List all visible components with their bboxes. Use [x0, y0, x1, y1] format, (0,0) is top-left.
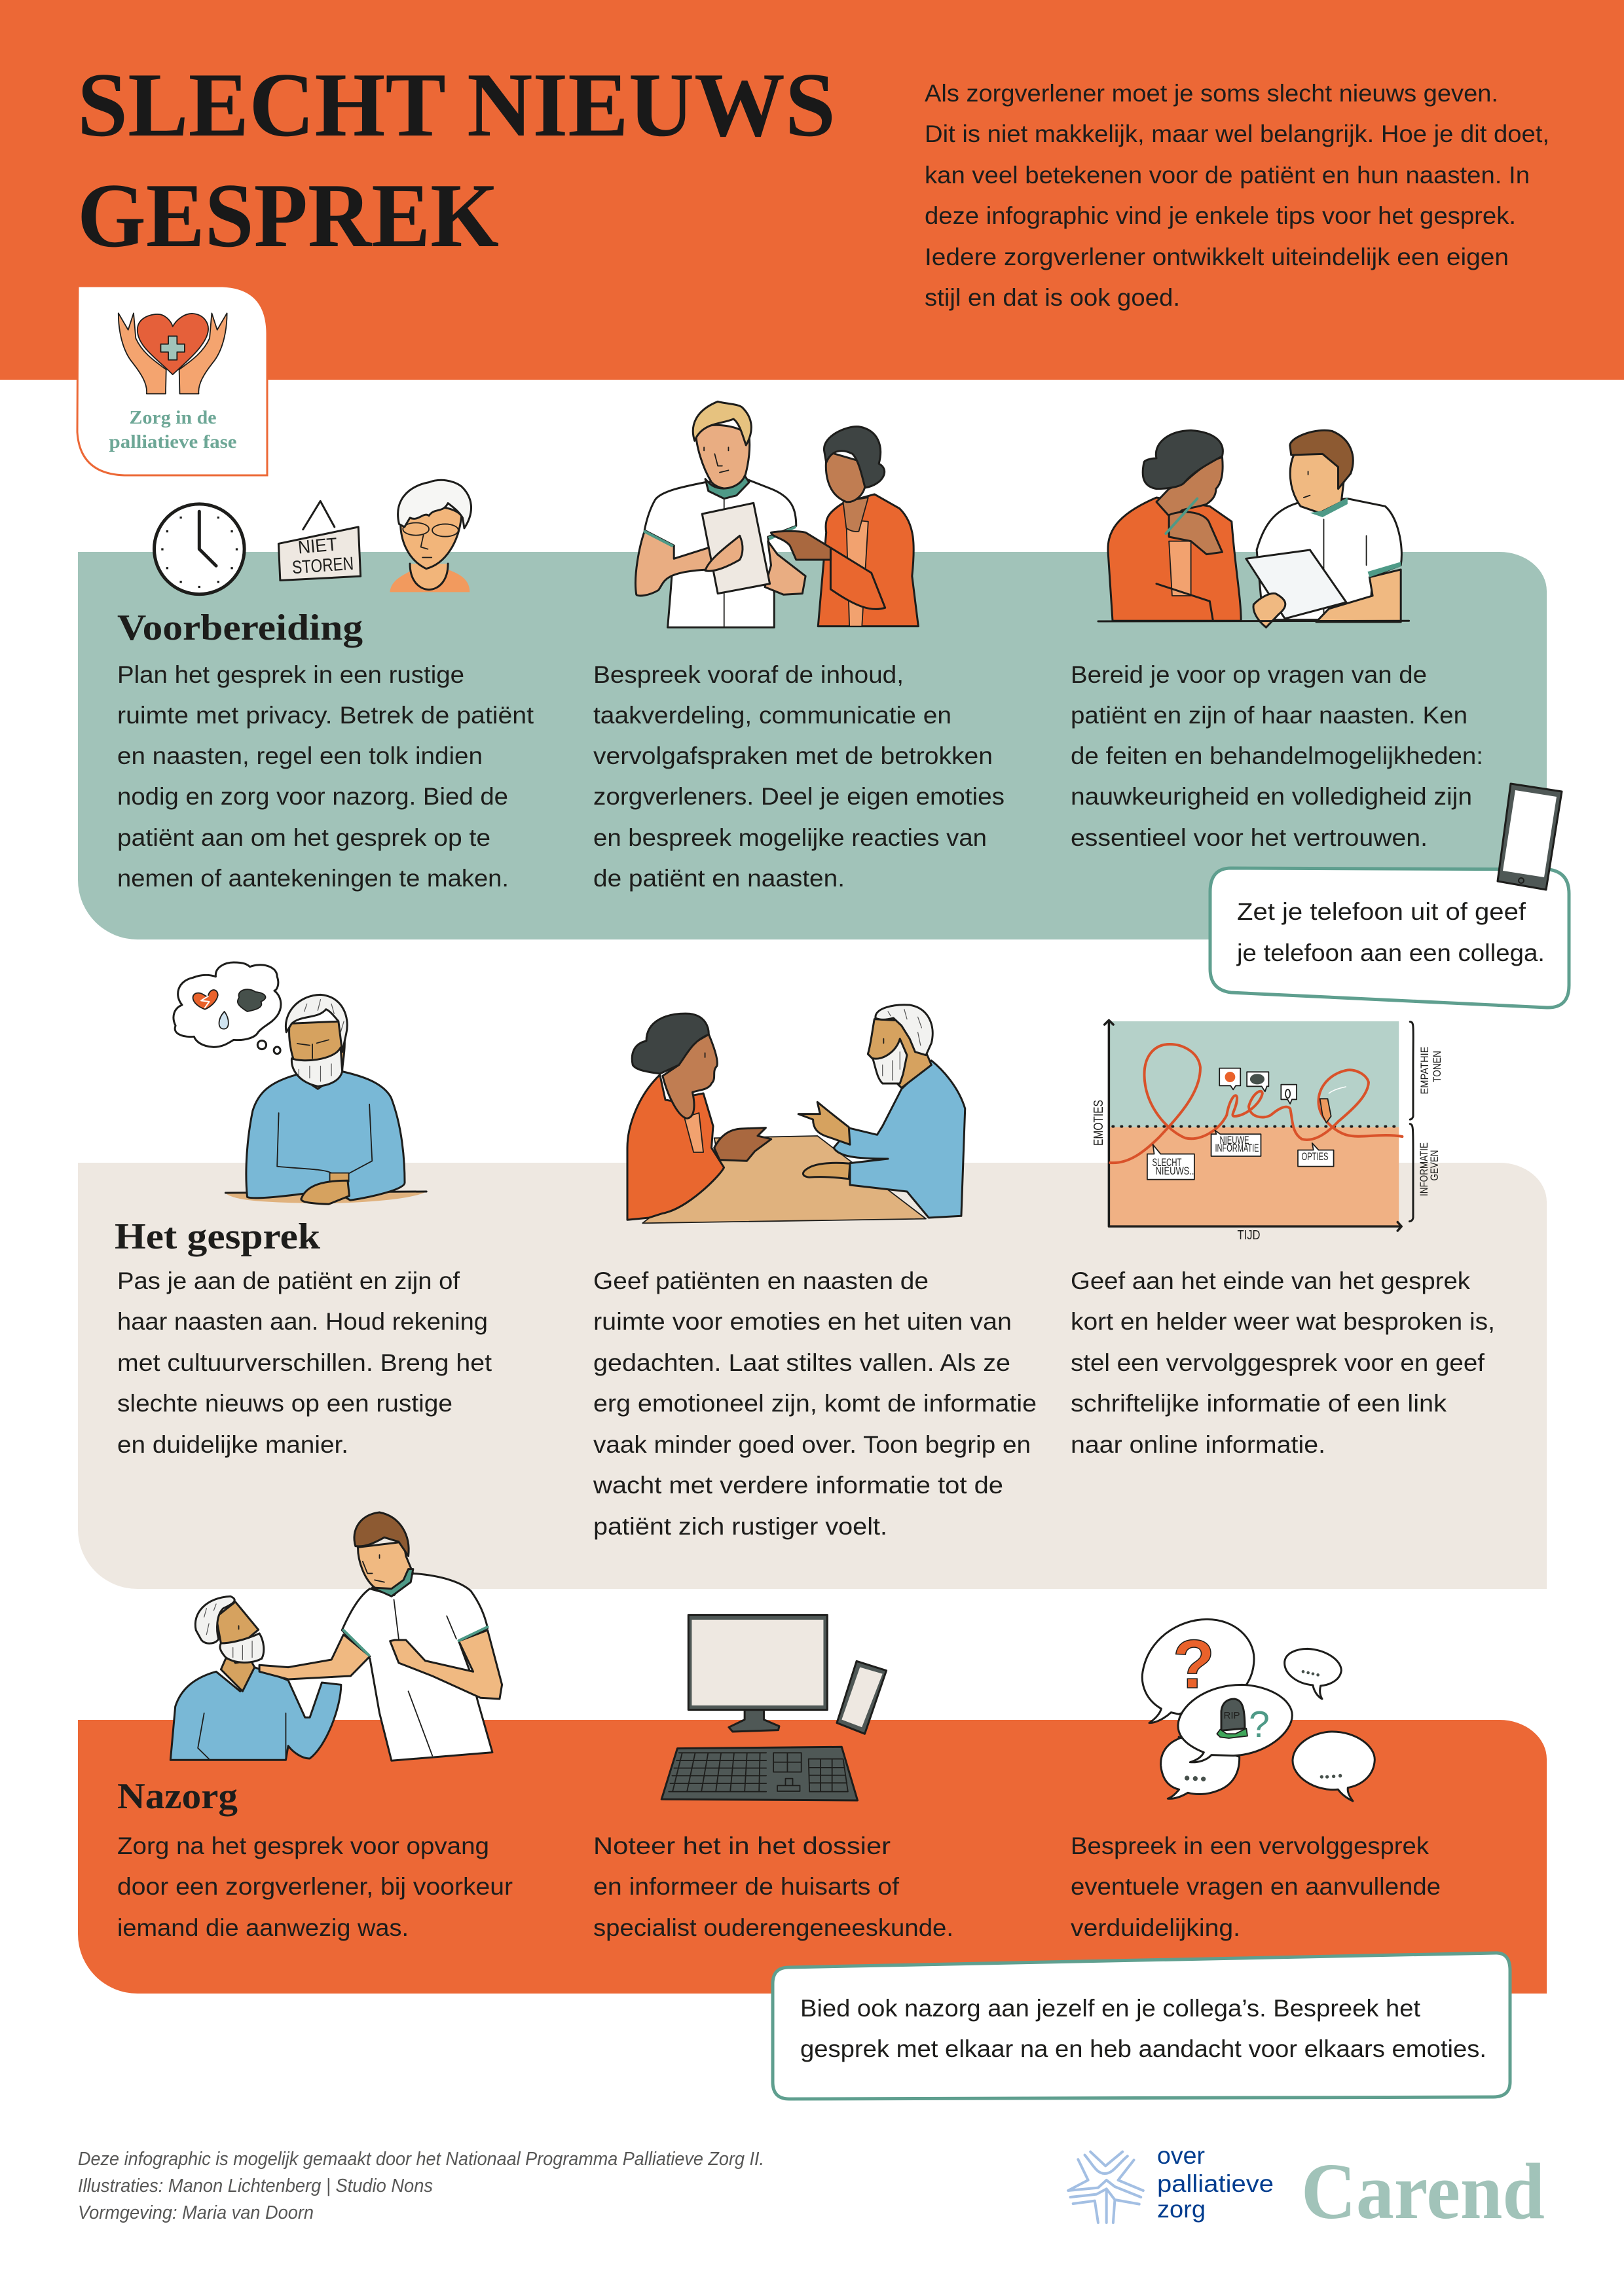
text column 3: Bespreek in een vervolggesprek	[1071, 1832, 1430, 1859]
intro text: Dit is niet makkelijk, maar wel belangrijk. Hoe je dit doet,	[925, 120, 1549, 147]
text column 1: ruimte met privacy. Betrek de patiënt	[117, 702, 534, 729]
text column 1: nemen of aantekeningen te maken.	[117, 865, 509, 892]
icon: niet storen sign	[278, 501, 361, 581]
text column 3	[1071, 1267, 1495, 1458]
text column 2: gedachten. Laat stiltes vallen. Als ze	[593, 1349, 1010, 1376]
text column 1: en naasten, regel een tolk indien	[117, 742, 483, 769]
chart axis labels: EMPATHIE	[1418, 1046, 1431, 1095]
text column 1: slechte nieuws op een rustige	[117, 1390, 452, 1417]
text column 2: zorgverleners. Deel je eigen emoties	[593, 783, 1005, 810]
text column 1: nodig en zorg voor nazorg. Bied de	[117, 783, 508, 810]
illustration: colleagues at table with paper	[1098, 430, 1409, 627]
text column 3: patiënt en zijn of haar naasten. Ken	[1071, 702, 1467, 729]
footer credits	[78, 2149, 764, 2223]
footer credits: Illustraties: Manon Lichtenberg | Studio Nons	[78, 2176, 433, 2196]
illustration: speech bubbles	[1142, 1619, 1375, 1801]
text column 2: vervolgafspraken met de betrokken	[593, 742, 993, 769]
text column 1: haar naasten aan. Houd rekening	[117, 1308, 488, 1335]
icon: person with glasses	[390, 480, 471, 592]
text column 3: eventuele vragen en aanvullende	[1071, 1873, 1441, 1900]
chart axis labels: EMOTIES	[1092, 1100, 1106, 1146]
text column 3: essentieel voor het vertrouwen.	[1071, 824, 1428, 851]
callout: nazorg voor jezelf: gesprek met elkaar na en heb aandacht voor elkaars emoties.	[800, 2035, 1486, 2062]
intro text: stijl en dat is ook goed.	[925, 284, 1180, 311]
text column 3: schriftelijke informatie of een link	[1071, 1390, 1447, 1417]
intro text: kan veel betekenen voor de patiënt en hun naasten. In	[925, 162, 1530, 189]
illustration: computer, keyboard and phone	[661, 1615, 887, 1800]
illustration: sad man with thought cloud	[174, 962, 426, 1204]
badge: zorg in de palliatieve fase	[77, 286, 267, 475]
text column 3: stel een vervolggesprek voor en geef	[1071, 1349, 1485, 1376]
text column 2: en informeer de huisarts of	[593, 1873, 900, 1900]
footer credits: Vormgeving: Maria van Doorn	[78, 2202, 314, 2223]
panel: voorbereiding	[78, 552, 1547, 939]
icon: hands holding heart	[119, 313, 227, 393]
intro text: deze infographic vind je enkele tips voor het gesprek.	[925, 202, 1516, 229]
heading: voorbereiding: Voorbereiding	[117, 608, 363, 648]
chart labels: OPTIES	[1302, 1150, 1328, 1163]
icon: teal question mark: ?	[1249, 1704, 1270, 1745]
text column 1: door een zorgverlener, bij voorkeur	[117, 1873, 513, 1900]
intro text: Als zorgverlener moet je soms slecht nieuws geven.	[925, 80, 1498, 107]
text column 1: Zorg na het gesprek voor opvang	[117, 1832, 489, 1859]
text column 3: Geef aan het einde van het gesprek	[1071, 1267, 1471, 1294]
icon: star	[1068, 2152, 1143, 2223]
text column 3: Bereid je voor op vragen van de	[1071, 661, 1427, 688]
text column 1: en duidelijke manier.	[117, 1431, 348, 1458]
callout: nazorg voor jezelf	[773, 1953, 1510, 2099]
logo: over palliatieve zorg: palliatieve	[1157, 2170, 1274, 2197]
text column 2: erg emotioneel zijn, komt de informatie	[593, 1390, 1037, 1417]
chart labels: SLECHT	[1153, 1156, 1181, 1169]
header band	[0, 0, 1624, 380]
text column 3: de feiten en behandelmogelijkheden:	[1071, 742, 1483, 769]
callout: nazorg voor jezelf: Bied ook nazorg aan jezelf en je collega’s. Bespreek het	[800, 1995, 1421, 2022]
icon: phone	[1498, 784, 1562, 890]
text column 2: Noteer het in het dossier	[593, 1832, 891, 1859]
text column 2	[593, 1267, 1037, 1540]
badge: zorg in de palliatieve fase: palliatieve fase	[109, 431, 237, 452]
illustration: conversation at table	[627, 1005, 965, 1223]
text column 3: kort en helder weer wat besproken is,	[1071, 1308, 1495, 1335]
logo: over palliatieve zorg: over	[1157, 2142, 1205, 2169]
logo: over palliatieve zorg: zorg	[1157, 2196, 1206, 2223]
text column 1	[117, 1267, 492, 1458]
text column 2: ruimte voor emoties en het uiten van	[593, 1308, 1012, 1335]
illustration: nurse comforting patient	[170, 1512, 502, 1760]
callout: telefoon: je telefoon aan een collega.	[1236, 939, 1545, 966]
icon: niet storen sign: NIET	[297, 534, 338, 558]
icon: niet storen sign: STOREN	[291, 553, 354, 577]
logo: over palliatieve zorg	[1068, 2142, 1274, 2223]
text column 2: Geef patiënten en naasten de	[593, 1267, 929, 1294]
chart axis labels: INFORMATIE	[1418, 1142, 1430, 1196]
heading: nazorg: Nazorg	[117, 1776, 238, 1817]
chart labels: NIEUWS..	[1155, 1165, 1194, 1177]
footer credits: Deze infographic is mogelijk gemaakt door het Nationaal Programma Palliatieve Zorg II.	[78, 2149, 764, 2170]
intro text: Iedere zorgverlener ontwikkelt uiteindelijk een eigen	[925, 244, 1509, 270]
text column 2: specialist ouderengeneeskunde.	[593, 1914, 953, 1941]
icon: orange question mark: ?	[1173, 1626, 1215, 1703]
text column 2: wacht met verdere informatie tot de	[593, 1472, 1003, 1499]
chart axis labels	[1092, 1046, 1443, 1243]
text column 2	[593, 1832, 953, 1941]
chart axis labels: TIJD	[1238, 1228, 1260, 1243]
text column 2: vaak minder goed over. Toon begrip en	[593, 1431, 1031, 1458]
text column 3: verduidelijking.	[1071, 1914, 1240, 1941]
text column 1: met cultuurverschillen. Breng het	[117, 1349, 492, 1376]
title: GESPREK	[77, 165, 499, 266]
chart labels: NIEUWE	[1219, 1134, 1249, 1146]
text column 3: nauwkeurigheid en volledigheid zijn	[1071, 783, 1472, 810]
text column 2: patiënt zich rustiger voelt.	[593, 1513, 887, 1540]
chart axis labels: GEVEN	[1428, 1150, 1441, 1181]
text column 2: Bespreek vooraf de inhoud,	[593, 661, 904, 688]
heading: het gesprek: Het gesprek	[115, 1216, 321, 1257]
callout: telefoon: Zet je telefoon uit of geef	[1237, 898, 1526, 925]
text column 1: patiënt aan om het gesprek op te	[117, 824, 490, 851]
illustration: nurse and colleague with paper	[635, 401, 918, 627]
panel: nazorg	[78, 1720, 1547, 1994]
text column 1: Plan het gesprek in een rustige	[117, 661, 464, 688]
callout: telefoon	[1210, 868, 1569, 1008]
text column 1	[117, 1832, 513, 1941]
title: SLECHT NIEUWS	[77, 54, 836, 156]
text column 1	[117, 661, 534, 892]
panel: het gesprek	[78, 1163, 1547, 1589]
chart labels: INFORMATIE	[1215, 1142, 1259, 1154]
text column 3	[1071, 661, 1483, 851]
text column 2	[593, 661, 1005, 892]
chart axis labels: TONEN	[1431, 1051, 1443, 1082]
badge: zorg in de palliatieve fase: Zorg in de	[130, 407, 217, 428]
text column 3	[1071, 1832, 1441, 1941]
text column 2: de patiënt en naasten.	[593, 865, 845, 892]
text column 1: Pas je aan de patiënt en zijn of	[117, 1267, 460, 1294]
intro text	[925, 80, 1549, 311]
logo: carend: Carend	[1301, 2147, 1545, 2236]
chart: emoties over tijd	[1092, 1020, 1443, 1243]
text column 2: taakverdeling, communicatie en	[593, 702, 951, 729]
label: rip: RIP	[1223, 1710, 1240, 1721]
chart labels	[1153, 1134, 1328, 1177]
title	[77, 54, 836, 266]
text column 1: iemand die aanwezig was.	[117, 1914, 409, 1941]
text column 3: naar online informatie.	[1071, 1431, 1325, 1458]
text column 2: en bespreek mogelijke reacties van	[593, 824, 987, 851]
icon: clock	[154, 504, 244, 594]
